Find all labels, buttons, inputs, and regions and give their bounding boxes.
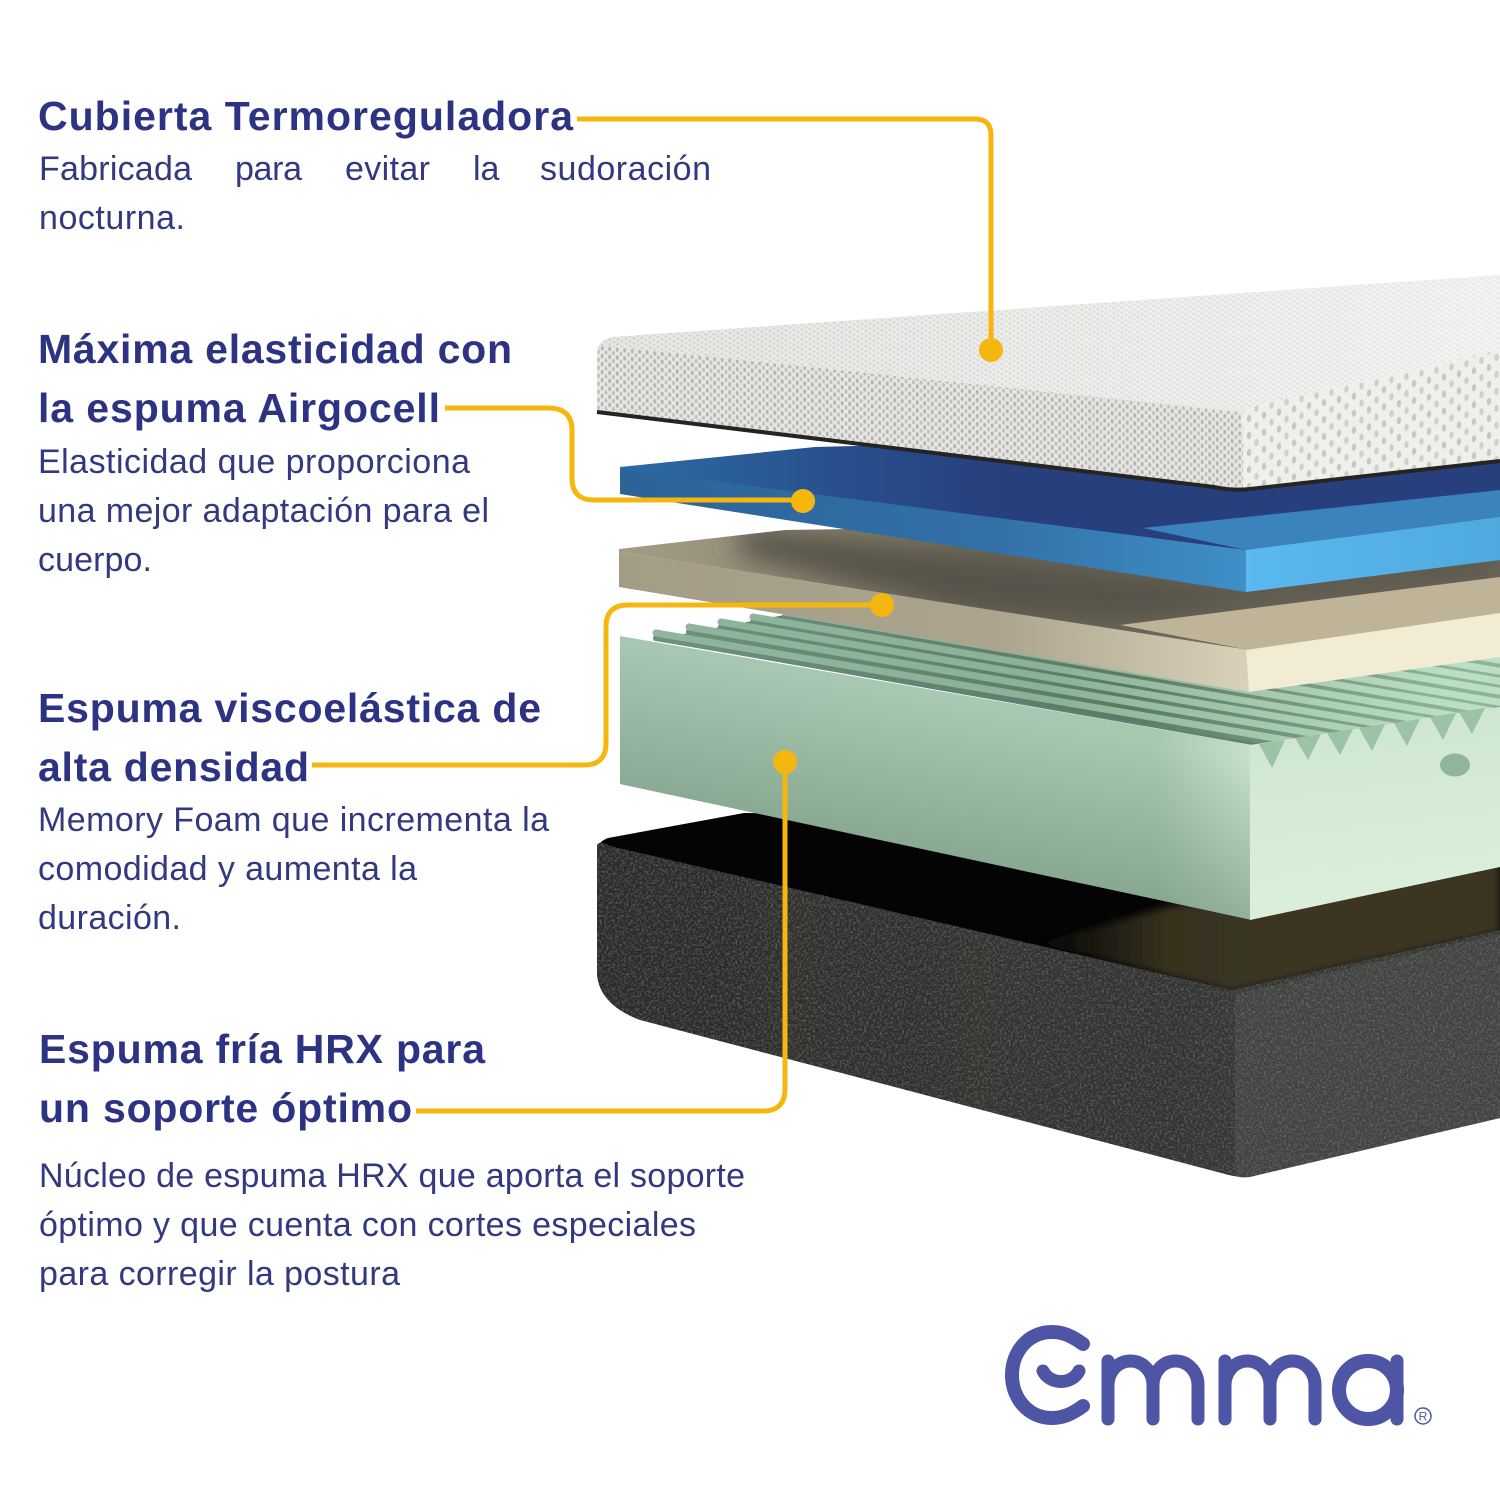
body: airgocell: cuerpo. xyxy=(38,541,152,579)
connector: viscoelastic xyxy=(312,593,894,765)
body: viscoelastic: comodidad y aumenta la xyxy=(38,850,417,888)
heading: viscoelastic: Espuma viscoelástica de xyxy=(38,685,541,731)
body: viscoelastic: duración. xyxy=(38,899,181,937)
heading: airgocell: la espuma Airgocell xyxy=(38,385,440,431)
mattress illustration xyxy=(597,275,1500,1177)
layer: dark base xyxy=(597,813,1500,1177)
layer: green HRX foam xyxy=(620,577,1500,920)
connector: airgocell xyxy=(445,408,815,513)
body: cover: para xyxy=(235,150,302,188)
text block: HRX xyxy=(39,1026,745,1293)
layer: blue Airgocell foam xyxy=(620,430,1500,592)
body: cover: sudoración xyxy=(540,150,711,188)
heading: viscoelastic: alta densidad xyxy=(38,744,309,790)
layer: white quilted top cover xyxy=(597,275,1500,490)
text block: airgocell xyxy=(38,326,512,579)
heading: HRX: Espuma fría HRX para xyxy=(39,1026,486,1072)
body: cover: evitar xyxy=(345,150,430,188)
connector: HRX xyxy=(416,750,797,1111)
body: HRX: Núcleo de espuma HRX que aporta el soporte xyxy=(39,1157,745,1195)
heading: airgocell: Máxima elasticidad con xyxy=(38,326,512,372)
heading: HRX: un soporte óptimo xyxy=(39,1085,412,1131)
body: cover: la xyxy=(473,150,500,188)
text block: viscoelastic xyxy=(38,685,549,937)
connector: cover xyxy=(577,119,1003,362)
body: cover: Fabricada xyxy=(39,150,192,188)
foam air hole xyxy=(1440,754,1470,776)
layer: beige memory foam xyxy=(619,520,1500,692)
heading: cover: Cubierta Termoreguladora xyxy=(38,93,574,139)
logo: Emma xyxy=(1012,1332,1431,1424)
body: airgocell: una mejor adaptación para el xyxy=(38,492,489,530)
body: viscoelastic: Memory Foam que incrementa la xyxy=(38,801,549,839)
body: cover: nocturna. xyxy=(39,199,185,237)
body: HRX: óptimo y que cuenta con cortes especiales xyxy=(39,1206,696,1244)
text block: cover xyxy=(38,93,711,237)
body: HRX: para corregir la postura xyxy=(39,1255,400,1293)
body: airgocell: Elasticidad que proporciona xyxy=(38,443,470,481)
logo: Emma: R xyxy=(1419,1410,1428,1424)
